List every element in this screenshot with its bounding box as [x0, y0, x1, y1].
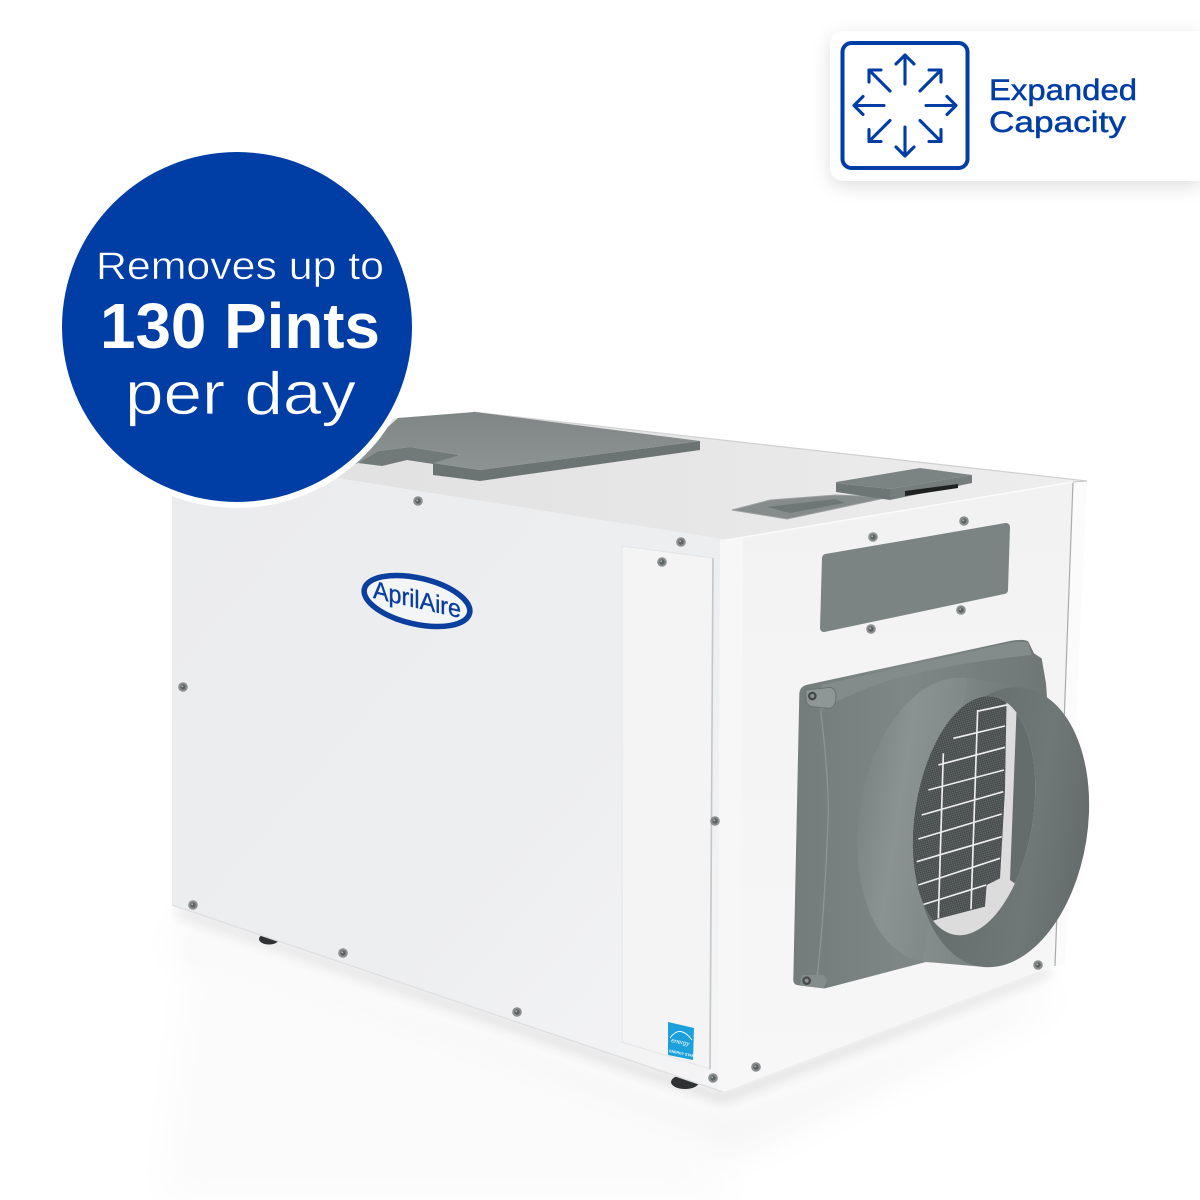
- badge label: [989, 74, 1137, 139]
- collar opening: [912, 696, 1036, 936]
- lower screw pocket: [800, 975, 827, 988]
- corner bend strip: [718, 537, 743, 1092]
- cabinet screws: [178, 496, 1043, 1083]
- inner wall shade: [1010, 712, 1036, 884]
- collar cylinder body: [838, 665, 1052, 975]
- rear vent cover: [824, 527, 1006, 628]
- plate raised band: [821, 642, 1032, 711]
- callout line: 130 pints: 130 Pints: [100, 290, 380, 362]
- badge panel: [830, 31, 1200, 181]
- AprilAire logo: AprilAire: [373, 576, 461, 624]
- badge label: Expanded: [989, 74, 1137, 107]
- cabinet front face: [172, 452, 727, 1092]
- callout line: removes up to: Removes up to: [96, 245, 384, 288]
- callout line: per day: per day: [125, 360, 356, 427]
- capacity callout circle: [56, 146, 418, 508]
- filter mesh: [912, 696, 1006, 921]
- ENERGY STAR label: ENERGY STAR: [669, 1049, 695, 1058]
- plate crease line: [817, 711, 828, 975]
- icon: expanding arrows: [842, 43, 968, 168]
- cabinet right face: [723, 482, 1073, 1092]
- filter frame lines: [917, 705, 1007, 918]
- collar front rim: [896, 675, 1108, 980]
- top access cover: [340, 412, 700, 481]
- floor reflection: [160, 925, 1055, 1200]
- cover notch wall: [358, 447, 460, 466]
- upper screw pocket: [806, 687, 836, 708]
- front access door panel: [622, 546, 713, 1069]
- AprilAire logo: [359, 566, 475, 636]
- support feet: [259, 934, 699, 1089]
- ENERGY STAR label: [668, 1022, 695, 1060]
- badge label: Capacity: [989, 106, 1126, 139]
- dehumidifier product: [172, 412, 1108, 1102]
- cabinet top face: [172, 412, 1087, 540]
- expanded capacity badge: [830, 31, 1200, 181]
- contact shadow: [176, 908, 1050, 1102]
- cover front wall: [433, 441, 700, 481]
- inner back wall: [912, 696, 1036, 936]
- right end flange: [1055, 481, 1087, 968]
- cover top surface: [340, 412, 700, 470]
- control module on top: [732, 468, 972, 519]
- ENERGY STAR label: energy: [671, 1038, 691, 1048]
- mounting plate: [793, 640, 1050, 988]
- duct collar assembly: [793, 640, 1108, 988]
